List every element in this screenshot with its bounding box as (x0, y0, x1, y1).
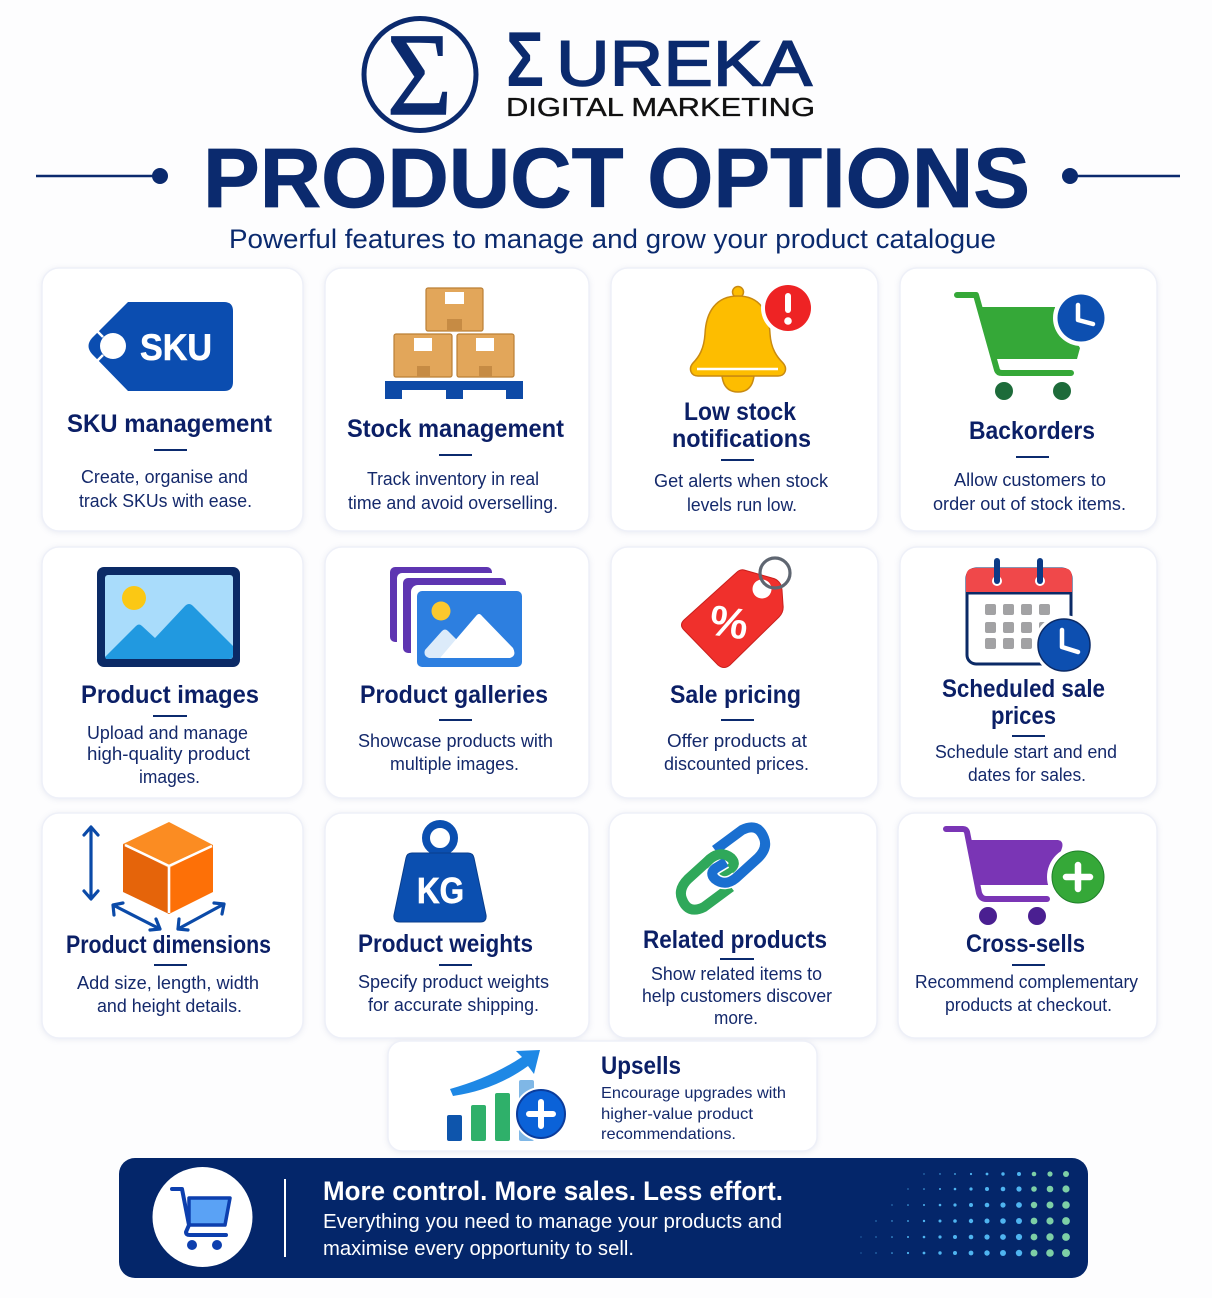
heading: Scheduled sale (942, 675, 1105, 703)
heading: Product galleries (360, 681, 548, 709)
description: Upload and manage (87, 723, 248, 743)
icon: bell with alert (691, 281, 815, 392)
panel: Scheduled sale prices (900, 547, 1157, 798)
title: Product Options: PRODUCT OPTIONS (203, 131, 1030, 225)
description: help customers discover (642, 986, 832, 1006)
description (358, 972, 549, 1015)
description: Allow customers to (954, 470, 1106, 490)
heading: Sale pricing (670, 681, 801, 709)
description (601, 1085, 786, 1143)
panel: Cross-sells (898, 813, 1157, 1038)
description: levels run low. (687, 495, 797, 515)
panel: Product images (42, 547, 303, 798)
icon: SKU tag (88, 302, 233, 391)
panel: Backorders (900, 268, 1157, 531)
icon: sigma in circle: Σ (387, 9, 452, 140)
icon: SKU tag: SKU (140, 327, 212, 368)
subtitle: Powerful features to manage and grow your product catalogue (229, 224, 996, 254)
description: recommendations. (601, 1126, 736, 1143)
description: time and avoid overselling. (348, 493, 558, 513)
description (915, 972, 1138, 1015)
heading: SKU management (67, 410, 273, 438)
heading: Product dimensions (66, 931, 271, 959)
wordmark: UREKA (556, 28, 812, 100)
dot pattern (860, 1171, 1070, 1257)
heading: Cross-sells (966, 930, 1085, 958)
description: for accurate shipping. (368, 995, 539, 1015)
logo: Eureka Digital Marketing (364, 9, 815, 140)
panel: Stock management (325, 268, 589, 531)
banner text: maximise every opportunity to sell. (323, 1238, 634, 1260)
description: Schedule start and end (935, 742, 1117, 762)
heading: Upsells (601, 1052, 681, 1080)
description: multiple images. (390, 754, 519, 774)
description: Track inventory in real (367, 469, 539, 489)
heading: Related products (643, 926, 827, 954)
description (358, 731, 553, 774)
description (87, 723, 250, 787)
panel: Low stock notifications (611, 268, 878, 531)
icon: sale tag (682, 558, 790, 668)
description: more. (714, 1008, 758, 1028)
description: Recommend complementary (915, 972, 1138, 992)
description (935, 742, 1117, 785)
description: Create, organise and (81, 467, 248, 487)
description: Specify product weights (358, 972, 549, 992)
description (77, 973, 259, 1016)
icon: growth chart with plus (447, 1050, 568, 1141)
banner heading: More control. More sales. Less effort. (323, 1176, 783, 1206)
icon: green cart with clock (957, 290, 1109, 400)
panel: Product dimensions (42, 813, 303, 1038)
description (664, 731, 809, 774)
icon: framed picture (97, 567, 240, 667)
icon: KG weight (394, 824, 486, 922)
description: and height details. (97, 996, 242, 1016)
icon: KG weight: KG (417, 870, 464, 911)
description: high-quality product (87, 744, 250, 764)
description: higher-value product (601, 1106, 754, 1123)
heading: Stock management (347, 415, 565, 443)
panel: Related products (609, 813, 877, 1038)
panel: Product weights (325, 813, 589, 1038)
icon: calendar with clock (966, 561, 1094, 675)
heading: Product images (81, 681, 259, 709)
banner text (323, 1211, 782, 1260)
heading: prices (991, 702, 1056, 730)
description: dates for sales. (968, 765, 1086, 785)
description: discounted prices. (664, 754, 809, 774)
icon: chain link (681, 827, 765, 910)
wordmark (506, 15, 815, 122)
banner text: Everything you need to manage your products and (323, 1211, 782, 1233)
description (79, 467, 252, 511)
icon: purple cart with plus (946, 829, 1109, 925)
panel: Upsells (388, 1041, 817, 1151)
heading (672, 398, 811, 453)
panel: Product galleries (325, 547, 589, 798)
heading: Low stock (684, 398, 796, 426)
heading: notifications (672, 425, 811, 453)
description: order out of stock items. (933, 494, 1126, 514)
icon: cube with arrows (84, 822, 224, 930)
description: Add size, length, width (77, 973, 259, 993)
icon: sale tag: % (707, 597, 751, 649)
description (642, 964, 832, 1028)
wordmark: DIGITAL MARKETING (506, 92, 815, 122)
heading: Product weights (358, 930, 533, 958)
icon: cart in white circle (152, 1167, 252, 1267)
description (654, 471, 829, 515)
icon: boxes on pallet (385, 288, 523, 399)
description: track SKUs with ease. (79, 491, 252, 511)
wordmark: Σ (506, 15, 544, 103)
description: Offer products at (667, 731, 807, 751)
panel: SKU management (42, 268, 303, 531)
description: Get alerts when stock (654, 471, 829, 491)
description: images. (139, 767, 200, 787)
description: Show related items to (651, 964, 822, 984)
icon: image stack (390, 567, 528, 673)
description: Encourage upgrades with (601, 1085, 786, 1102)
panel: Sale pricing (611, 547, 878, 798)
icon: sigma in circle (364, 9, 476, 140)
description: products at checkout. (945, 995, 1112, 1015)
description (933, 470, 1126, 514)
heading: Backorders (969, 417, 1095, 445)
banner: call to action (119, 1158, 1088, 1278)
heading (942, 675, 1105, 730)
description (348, 469, 558, 513)
description: Showcase products with (358, 731, 553, 751)
